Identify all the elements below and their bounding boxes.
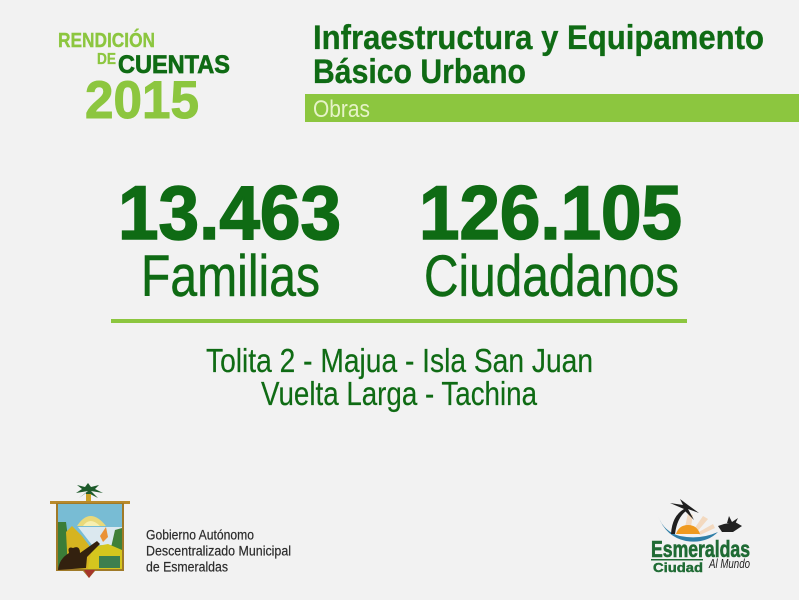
locations text: Vuelta Larga - Tachina [261,375,538,412]
section bar: Obras [305,94,799,123]
logo: Rendición de Cuentas 2015: DE [97,51,116,68]
heading: Infraestructura y Equipamento: Infraestructura y Equipamento [313,19,764,57]
heading: Infraestructura y Equipamento [313,19,764,91]
logo: Esmeraldas Ciudad Al Mundo [651,499,750,575]
icon: coat of arms of Esmeraldas [50,483,130,578]
statistic: 13.463 Familias [118,171,341,309]
logo: Rendición de Cuentas 2015: 2015 [85,71,199,130]
locations text: Tolita 2 - Majua - Isla San Juan [206,342,593,379]
text: institution name: de Esmeraldas [146,560,228,574]
logo: Esmeraldas Ciudad Al Mundo: Ciudad [653,560,703,575]
locations text [206,342,593,412]
text: institution name [146,528,291,574]
statistic: 13.463 Familias: Familias [141,244,320,309]
text: institution name: Gobierno Autónomo [146,528,254,542]
logo: Rendición de Cuentas 2015: RENDICIÓN [58,28,155,52]
statistic: 126.105 Ciudadanos: Ciudadanos [424,244,679,309]
statistic: 13.463 Familias: 13.463 [118,171,341,256]
section bar: Obras: Obras [313,96,370,123]
text: institution name: Descentralizado Municipal [146,544,291,558]
logo: Rendición de Cuentas 2015 [58,28,230,130]
logo: Esmeraldas Ciudad Al Mundo: Esmeraldas [651,536,750,562]
statistic: 126.105 Ciudadanos: 126.105 [419,171,682,256]
heading: Infraestructura y Equipamento: Básico Urbano [313,53,526,91]
logo: Esmeraldas Ciudad Al Mundo: Al Mundo [708,556,750,571]
statistic: 126.105 Ciudadanos [419,171,682,309]
logo: Rendición de Cuentas 2015: CUENTAS [118,51,230,79]
